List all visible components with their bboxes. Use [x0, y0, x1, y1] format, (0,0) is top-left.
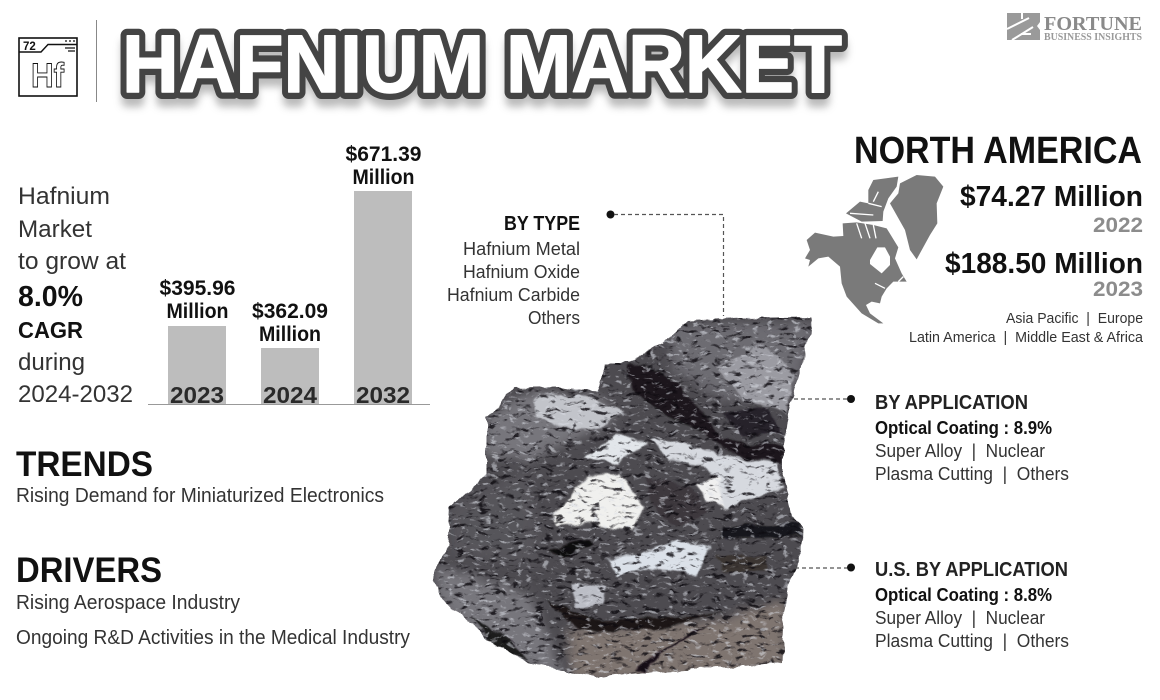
- bar 2023: [168, 326, 226, 404]
- connector: by application: [794, 395, 855, 403]
- panel: U.S. by application: U.S. BY APPLICATION: [875, 559, 1068, 581]
- panel: U.S. by application: Optical Coating : 8.8%: [875, 585, 1052, 605]
- streak texture: [425, 310, 820, 685]
- other regions: Asia Pacific | Europe: [1006, 310, 1143, 327]
- title: HAFNIUM MARKET: [122, 28, 842, 119]
- panel: north america: Latin America | Middle East & Africa: [909, 329, 1144, 346]
- year 2024: 2024: [263, 382, 317, 408]
- year 2023: 2023: [170, 382, 224, 408]
- icon: hafnium element tile: Hf: [31, 57, 65, 95]
- panel: by application: [875, 392, 1069, 484]
- panel: trends: [16, 445, 384, 507]
- panel: U.S. by application: Plasma Cutting | Others: [875, 630, 1069, 651]
- value unit 2032: Million: [352, 166, 414, 189]
- value label 2024: $362.09: [252, 300, 328, 323]
- year 2022: 2022: [1093, 214, 1143, 237]
- panel: U.S. by application: Super Alloy | Nuclear: [875, 607, 1045, 628]
- value label 2023: $395.96: [160, 277, 236, 300]
- facets: [470, 343, 802, 672]
- text block: CAGR statement: Market: [18, 216, 92, 243]
- image: hafnium rock: [425, 310, 820, 685]
- value 2022: $74.27 Million: [960, 181, 1143, 213]
- icon: hafnium element tile: [19, 38, 77, 96]
- panel: by application: BY APPLICATION: [875, 392, 1028, 414]
- text block: CAGR statement: Hafnium: [18, 183, 110, 210]
- panel: trends: TRENDS: [16, 445, 153, 484]
- panel: drivers: DRIVERS: [16, 551, 162, 590]
- year 2023: 2023: [1093, 278, 1143, 301]
- divider: [96, 20, 98, 102]
- connector: by type: [606, 210, 724, 316]
- panel: by type: Others: [528, 307, 580, 328]
- bar 2032: [354, 191, 412, 404]
- map: North America: [805, 175, 943, 323]
- bar chart: market size: [148, 143, 430, 408]
- icon: hafnium element tile: 72: [23, 41, 36, 53]
- text block: CAGR statement: during: [18, 349, 85, 376]
- panel: by application: Super Alloy | Nuclear: [875, 440, 1045, 461]
- logo: Fortune Business Insights: FORTUNE: [1044, 13, 1142, 35]
- title: HAFNIUM MARKET: [122, 19, 842, 110]
- panel: by type: Hafnium Oxide: [463, 261, 580, 282]
- text block: CAGR statement: CAGR: [18, 317, 83, 343]
- value unit 2023: Million: [166, 300, 228, 323]
- value 2023: $188.50 Million: [945, 248, 1143, 280]
- panel: by application: Plasma Cutting | Others: [875, 463, 1069, 484]
- panel: by application: Optical Coating : 8.9%: [875, 418, 1052, 438]
- panel: drivers: Ongoing R&D Activities in the Medical Industry: [16, 627, 410, 649]
- panel: north america: [805, 130, 1144, 346]
- connector: U.S. by application: [795, 564, 855, 572]
- title: HAFNIUM MARKET: [122, 19, 842, 110]
- value label 2032: $671.39: [346, 143, 422, 166]
- panel: drivers: [16, 551, 410, 649]
- panel: by type: [447, 213, 580, 328]
- panel: by type: BY TYPE: [504, 213, 580, 235]
- panel: by type: Hafnium Metal: [463, 238, 580, 259]
- value unit 2024: Million: [259, 323, 321, 346]
- logo: Fortune Business Insights: BUSINESS INSIGHTS: [1044, 32, 1142, 43]
- text block: CAGR statement: 8.0%: [18, 281, 83, 313]
- panel: drivers: Rising Aerospace Industry: [16, 592, 240, 614]
- bar 2024: [261, 348, 319, 404]
- logo: Fortune Business Insights: [1007, 13, 1142, 43]
- axis: [148, 404, 430, 406]
- panel: by type: Hafnium Carbide: [447, 284, 580, 305]
- panel: U.S. by application: [875, 559, 1069, 651]
- panel: trends: Rising Demand for Miniaturized Electronics: [16, 485, 384, 507]
- year 2032: 2032: [356, 382, 410, 408]
- text block: CAGR statement: 2024-2032: [18, 381, 133, 408]
- text block: CAGR statement: to grow at: [18, 248, 126, 275]
- broad tones: [437, 323, 813, 680]
- text block: CAGR statement: [18, 183, 133, 408]
